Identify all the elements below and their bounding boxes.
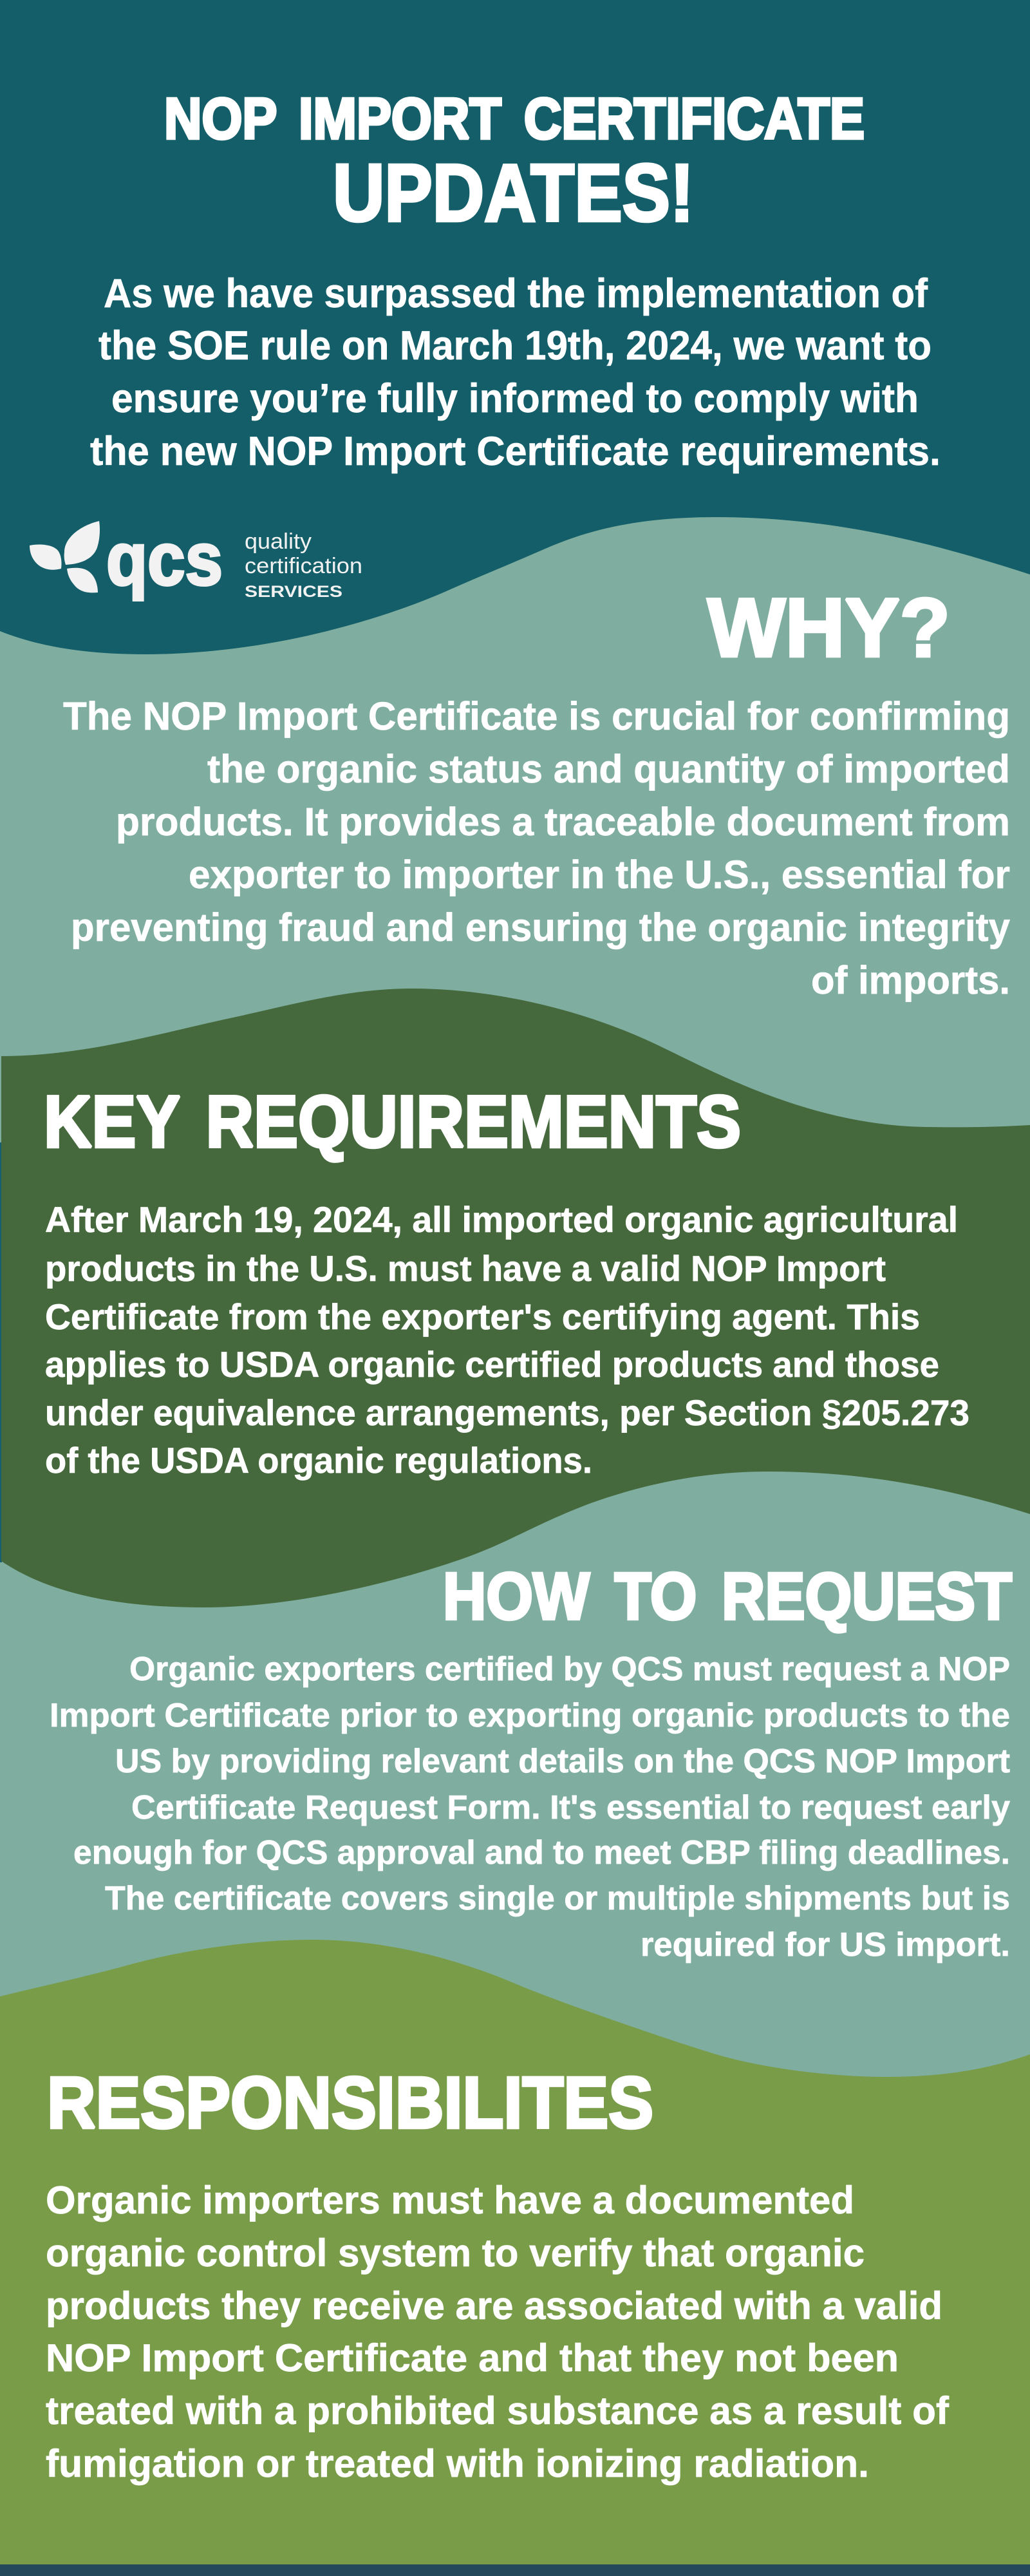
text block: responsibilities: Organic importers must have a documented: [46, 2179, 854, 2222]
text block: responsibilities: products they receive are associated with a valid: [46, 2284, 942, 2327]
heading: key requirements: KEY REQUIREMENTS: [44, 1081, 741, 1163]
panel: dark green key requirements wave: [1, 989, 1030, 1607]
text block: why: the organic status and quantity of imported: [207, 747, 1010, 791]
text block: responsibilities: treated with a prohibited substance as a result of: [46, 2389, 950, 2432]
logo tagline: certification: [245, 554, 362, 578]
logo tagline: quality: [245, 529, 312, 554]
text block: introduction: the SOE rule on March 19th, 2024, we want to: [98, 323, 932, 368]
title: [164, 87, 865, 238]
logo tagline: SERVICES: [245, 583, 342, 601]
text block: responsibilities: NOP Import Certificate and that they not been: [46, 2336, 899, 2380]
title: UPDATES!: [333, 147, 694, 238]
text block: how to request: enough for QCS approval and to meet CBP filing deadlines.: [73, 1834, 1010, 1871]
text block: why: of imports.: [811, 958, 1010, 1002]
panel: bright green responsibilities wave: [0, 1940, 1030, 2564]
text block: key requirements: products in the U.S. must have a valid NOP Import: [45, 1248, 886, 1289]
text block: key requirements: under equivalence arrangements, per Section §205.273: [45, 1392, 969, 1433]
text block: key requirements: [45, 1199, 969, 1481]
heading: responsibilities: RESPONSIBILITES: [47, 2062, 653, 2143]
title: NOP IMPORT CERTIFICATE: [164, 87, 865, 151]
icon: leaves: [30, 521, 100, 592]
text block: introduction: ensure you’re fully informed to comply with: [111, 376, 919, 421]
text block: how to request: The certificate covers single or multiple shipments but is: [105, 1880, 1010, 1917]
text block: introduction: the new NOP Import Certificate requirements.: [90, 429, 941, 474]
text block: why: products. It provides a traceable document from: [116, 800, 1010, 844]
text block: why: The NOP Import Certificate is crucial for confirming: [63, 694, 1010, 738]
text block: introduction: [90, 271, 941, 474]
panel: teal header wave: [0, 0, 1030, 654]
text block: responsibilities: fumigation or treated with ionizing radiation.: [46, 2442, 869, 2485]
panel: teal left edge strip: [0, 1142, 2, 1562]
text block: key requirements: applies to USDA organic certified products and those: [45, 1344, 939, 1385]
text block: why: preventing fraud and ensuring the organic integrity: [71, 905, 1010, 949]
logo tagline: [245, 529, 362, 601]
text block: introduction: As we have surpassed the implementation of: [104, 271, 928, 316]
text block: responsibilities: organic control system to verify that organic: [46, 2231, 865, 2275]
text block: how to request: Organic exporters certified by QCS must request a NOP: [129, 1651, 1010, 1688]
text block: how to request: Import Certificate prior to exporting organic products to the: [50, 1697, 1010, 1734]
text block: key requirements: After March 19, 2024, all imported organic agricultural: [45, 1199, 958, 1240]
text block: why: [63, 694, 1010, 1002]
panel: dark footer bar: [0, 2564, 1030, 2576]
heading: why: WHY?: [707, 582, 950, 674]
text block: responsibilities: [46, 2179, 950, 2485]
text block: how to request: Certificate Request Form. It's essential to request early: [131, 1789, 1010, 1826]
text block: how to request: US by providing relevant details on the QCS NOP Import: [115, 1743, 1010, 1780]
logo wordmark: qcs: [106, 517, 223, 601]
text block: how to request: [50, 1651, 1010, 1964]
text block: why: exporter to importer in the U.S., essential for: [189, 853, 1010, 896]
logo: QCS: [30, 517, 362, 601]
text block: key requirements: Certificate from the exporter's certifying agent. This: [45, 1296, 920, 1337]
text block: how to request: required for US import.: [641, 1926, 1010, 1964]
text block: key requirements: of the USDA organic regulations.: [45, 1440, 592, 1481]
